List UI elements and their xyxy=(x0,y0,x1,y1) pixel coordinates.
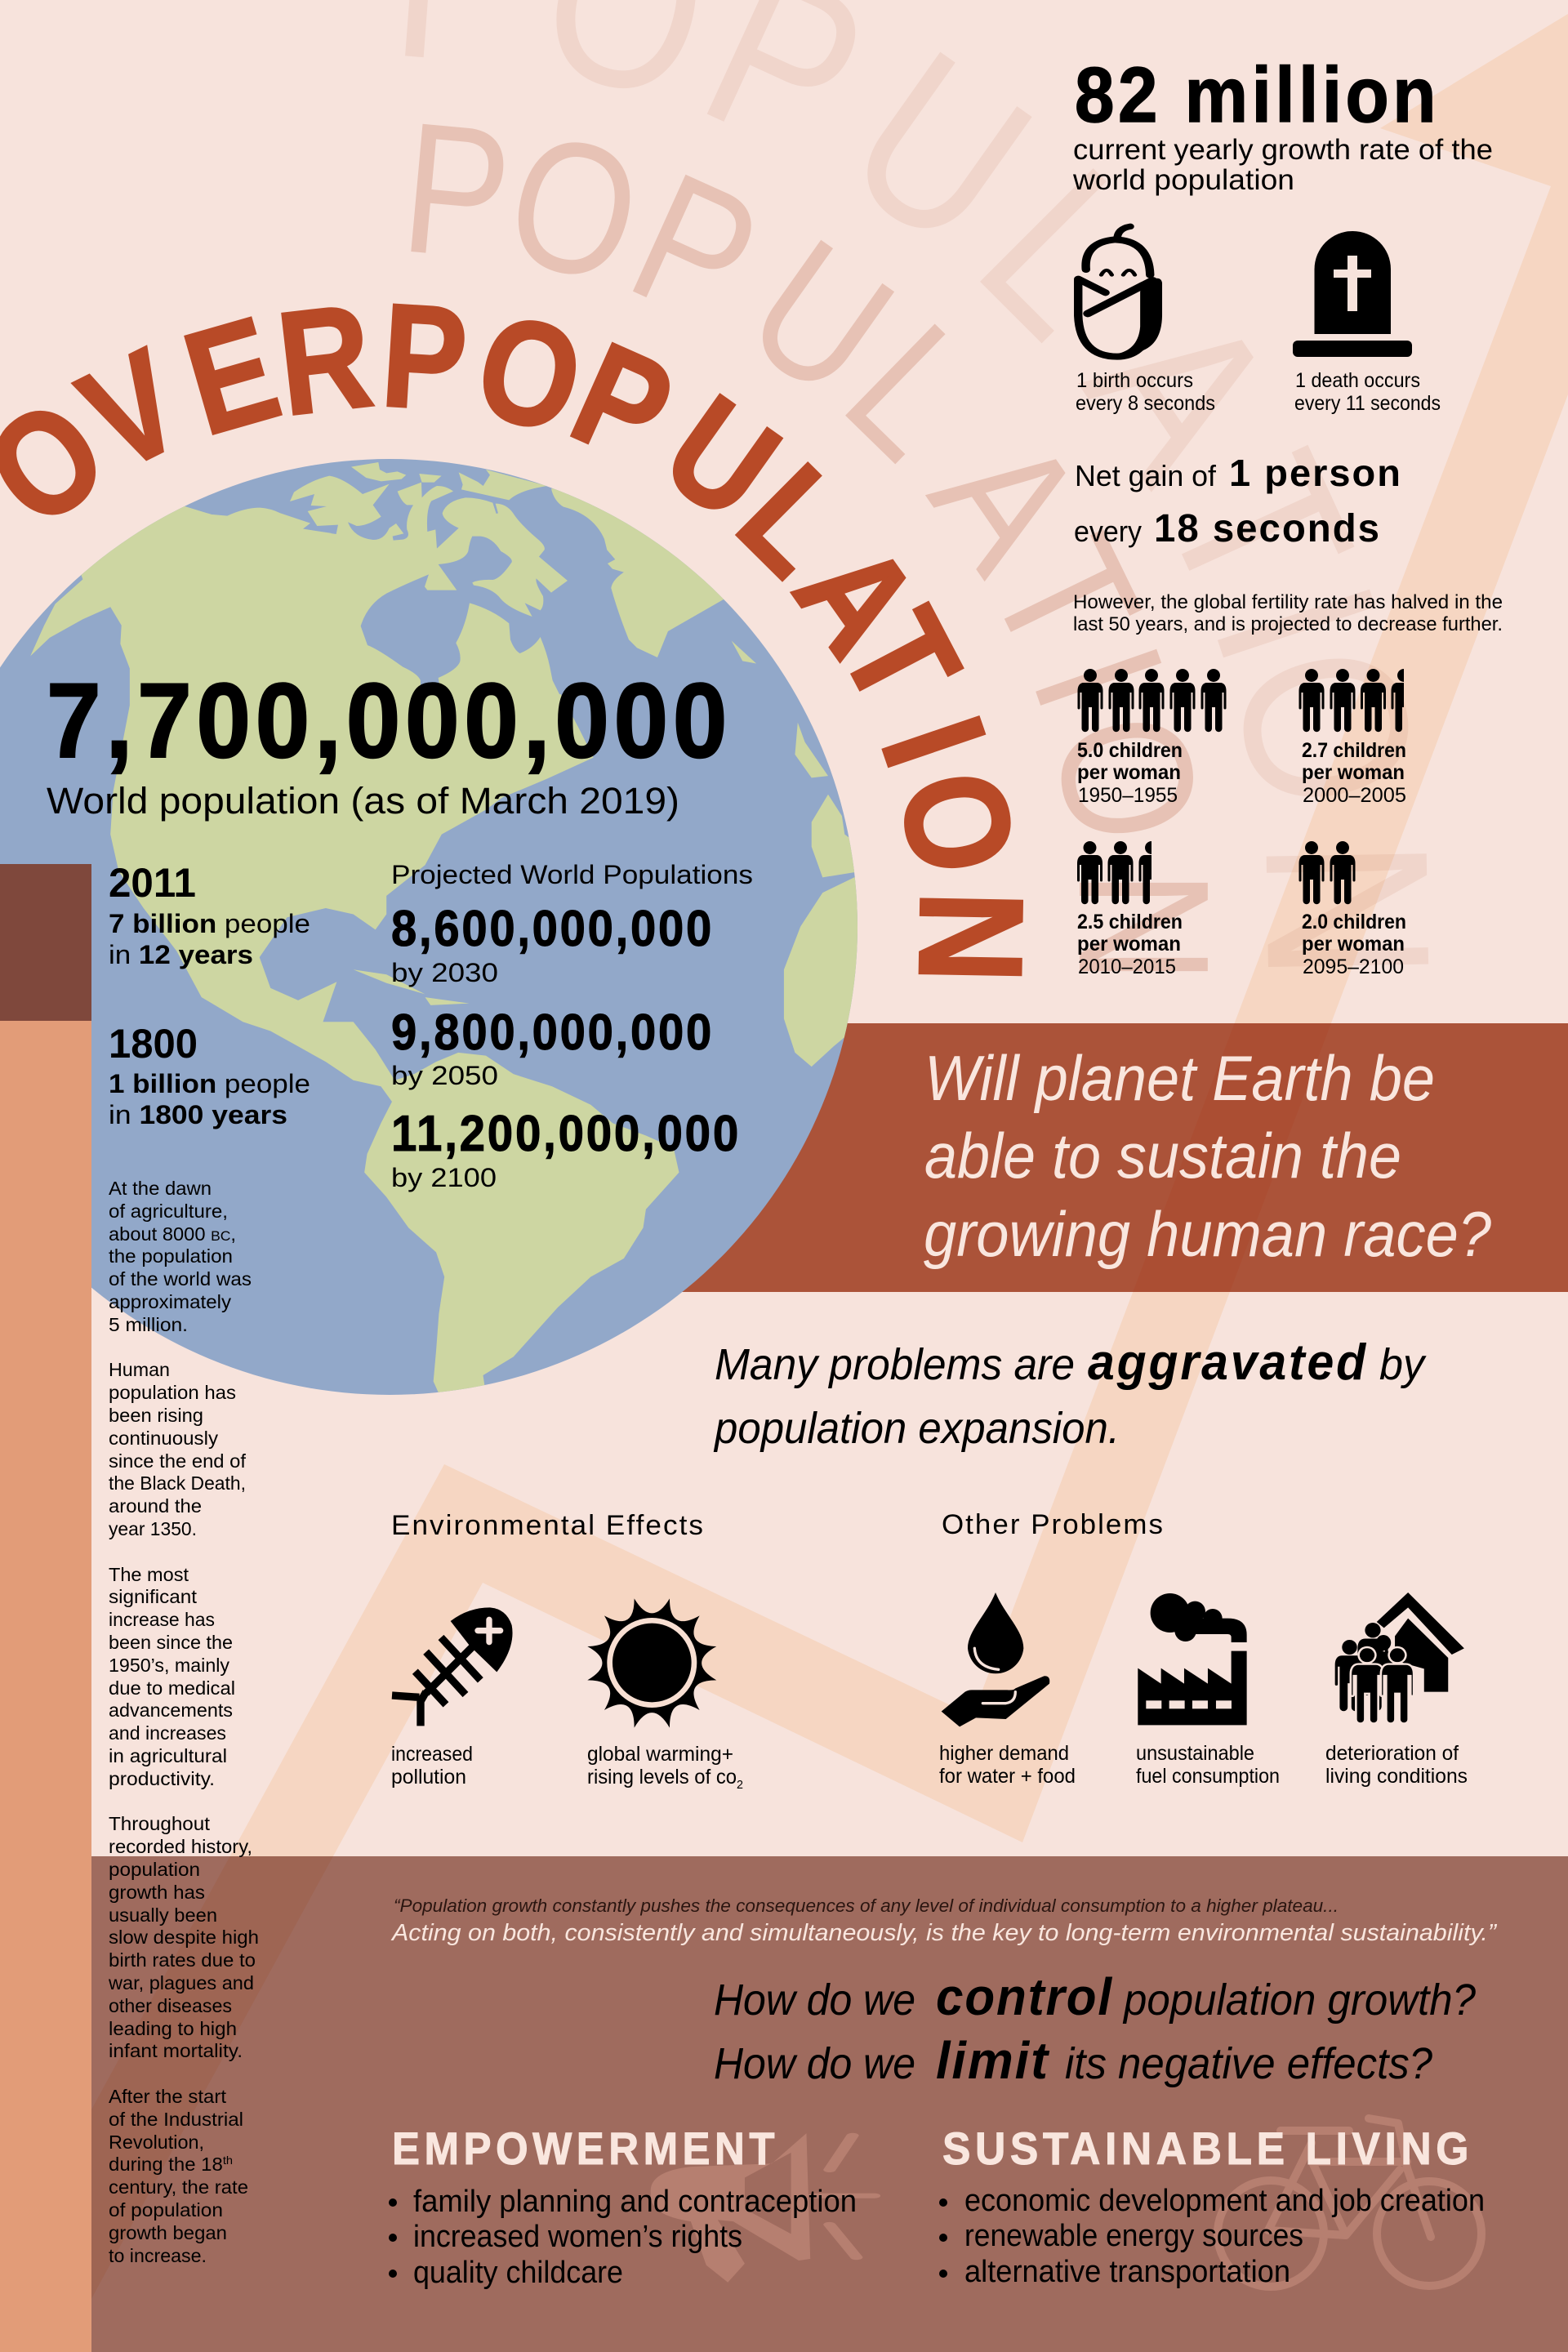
text block: history column: th xyxy=(223,2154,233,2167)
label: water and food: higher demand xyxy=(939,1742,1069,1765)
watermark: outer POPULATION arc: L xyxy=(933,122,1195,383)
chart: 2.7 children per woman xyxy=(1298,669,1405,802)
text block: history column: of agriculture, xyxy=(109,1200,228,1222)
watermark: outer POPULATION arc xyxy=(385,0,1478,984)
label: living conditions: deterioration of xyxy=(1325,1742,1459,1765)
label: increased pollution: pollution xyxy=(391,1766,466,1788)
text block: milestone 1800 xyxy=(109,1021,310,1129)
watermark: outer POPULATION arc: T xyxy=(1115,421,1401,639)
heading: environmental effects: Environmental Effects xyxy=(391,1510,705,1541)
text block: history column: leading to high xyxy=(109,2018,237,2039)
text block: milestone 1800: 1800 xyxy=(109,1021,198,1067)
chart: 5.0 children per woman: 5.0 children xyxy=(1077,739,1183,762)
chart: 5.0 children per woman xyxy=(1077,669,1227,807)
watermark: outer POPULATION arc: U xyxy=(806,3,1073,297)
watermark: inner POPULATION arc: P xyxy=(394,82,519,300)
chart: 2.5 children per woman xyxy=(1077,841,1183,978)
watermark: inner POPULATION arc: P xyxy=(605,132,786,366)
text block: history column: Throughout xyxy=(109,1813,211,1834)
quote: “Population growth constantly pushes the consequences of any level of individual consumption to a higher plateau... xyxy=(394,1895,1339,1916)
watermark: inner POPULATION arc: O xyxy=(488,91,660,324)
text block: milestone 1800: in 1800 years xyxy=(109,1100,287,1129)
title: P xyxy=(377,272,471,442)
text block: history column: since the end of xyxy=(109,1450,247,1472)
land: Iceland, Europe, Africa, Caribbean xyxy=(354,641,866,1067)
watermark: inner POPULATION arc: O xyxy=(1013,697,1242,859)
panel: empowerment: increased women’s rights xyxy=(413,2220,742,2254)
label: global warming: rising levels of co xyxy=(587,1766,744,1788)
heading: other problems: Other Problems xyxy=(942,1509,1165,1540)
text block: history column: approximately xyxy=(109,1291,232,1312)
text block: history column: growth began xyxy=(109,2222,227,2243)
title: I xyxy=(850,698,1018,785)
text block: death rate: every 11 seconds xyxy=(1294,392,1441,415)
question: will planet earth sustain: growing human race? xyxy=(924,1198,1492,1270)
chart: 2.0 children per woman xyxy=(1298,841,1406,978)
statement: problems aggravated: by xyxy=(1379,1340,1427,1389)
chart: 2.0 children per woman: 2.0 children xyxy=(1302,911,1406,933)
text block: projected world populations: Projected World Populations xyxy=(391,860,753,889)
label: water and food: for water + food xyxy=(939,1765,1076,1788)
statement: problems aggravated: Many problems are xyxy=(715,1340,1075,1389)
panel: empowerment: EMPOWERMENT xyxy=(392,2123,779,2174)
text block: projected world populations xyxy=(391,860,753,1192)
watermark: inner POPULATION arc: T xyxy=(951,508,1181,686)
title: E xyxy=(168,285,295,466)
question: will planet earth sustain xyxy=(924,1042,1492,1270)
chart: 2.7 children per woman: per woman xyxy=(1302,761,1405,784)
icon: megaphone watermark xyxy=(651,2133,875,2283)
title: U xyxy=(637,364,807,551)
text block: history column: in agricultural xyxy=(109,1745,227,1766)
watermark: inner POPULATION arc: I xyxy=(994,621,1205,733)
title: R xyxy=(270,273,380,447)
panel: sustainable living xyxy=(939,2123,1485,2289)
text block: history column: to increase. xyxy=(109,2245,207,2266)
land: Greenland xyxy=(551,476,729,657)
text block: history column: productivity. xyxy=(109,1768,215,1789)
headline stat: world population xyxy=(47,661,732,822)
text block: history column: birth rates due to xyxy=(109,1949,256,1971)
watermark: outer POPULATION arc: N xyxy=(1216,836,1478,984)
label: global warming: global warming+ xyxy=(587,1743,733,1766)
label: increased pollution xyxy=(391,1743,473,1788)
stat: net gain: 18 seconds xyxy=(1154,507,1381,550)
watermark: inner POPULATION arc: L xyxy=(808,286,1017,497)
watermark: inner POPULATION arc: N xyxy=(1040,870,1249,984)
question: limit negative effects xyxy=(714,2031,1432,2090)
watermark: inner POPULATION arc xyxy=(394,82,1249,984)
text block: projected world populations: by 2100 xyxy=(391,1163,497,1192)
text block: history column: population has xyxy=(109,1382,236,1403)
text block: history column: At the dawn xyxy=(109,1178,212,1199)
text block: projected world populations: by 2050 xyxy=(391,1061,498,1090)
watermark: inner POPULATION arc: A xyxy=(893,399,1124,604)
chart: 2.0 children per woman: 2095–2100 xyxy=(1303,956,1404,978)
text block: history column: century, the rate xyxy=(109,2176,248,2198)
land: Americas xyxy=(30,502,679,1400)
panel: empowerment xyxy=(389,2123,857,2290)
stat: 82 million growth rate xyxy=(1072,51,1493,196)
panel: empowerment: quality childcare xyxy=(413,2256,623,2290)
question: will planet earth sustain: Will planet Earth be xyxy=(924,1042,1435,1114)
stat: net gain: 1 person xyxy=(1229,452,1402,494)
text block: history column: year 1350. xyxy=(109,1518,197,1539)
watermark: outer POPULATION arc: I xyxy=(1165,556,1428,691)
text block: projected world populations: by 2030 xyxy=(391,958,498,987)
title xyxy=(0,272,1054,984)
text block: milestone 2011: 2011 xyxy=(109,860,196,906)
question: limit negative effects: limit xyxy=(936,2031,1050,2090)
panel: empowerment: family planning and contraception xyxy=(413,2185,857,2219)
text block: fertility note: last 50 years, and is projected to decrease further. xyxy=(1073,613,1503,635)
land: Canada and arctic xyxy=(212,462,568,721)
icon: bicycle watermark xyxy=(1218,2118,1481,2287)
text block: birth rate: every 8 seconds xyxy=(1076,392,1215,415)
label: fuel consumption: fuel consumption xyxy=(1136,1765,1280,1788)
statement: problems aggravated xyxy=(713,1334,1427,1453)
text block: milestone 2011 xyxy=(109,860,310,969)
text block: history column: the Black Death, xyxy=(109,1472,246,1494)
question: control population growth: How do we xyxy=(714,1976,915,2025)
text block: fertility note: However, the global fertility rate has halved in the xyxy=(1073,591,1503,613)
text block: history column: of population xyxy=(109,2199,223,2221)
text block: fertility note xyxy=(1073,591,1503,635)
text block: death rate xyxy=(1294,369,1441,415)
text block: history column: The most xyxy=(109,1564,189,1585)
icon: crowd and house xyxy=(1335,1592,1464,1723)
chart: 2.5 children per woman: 2010–2015 xyxy=(1078,956,1176,978)
stat: net gain: every xyxy=(1074,514,1142,548)
panel: sustainable living: renewable energy sources xyxy=(964,2219,1303,2253)
icon: swaddled baby xyxy=(1078,226,1162,357)
text block: history column: growth has xyxy=(109,1882,205,1903)
icon: water drop over hand xyxy=(942,1592,1049,1726)
text block: history column: continuously xyxy=(109,1428,219,1449)
text block: history column: Revolution, xyxy=(109,2132,204,2153)
icon: gravestone xyxy=(1293,231,1412,357)
question: control population growth: control xyxy=(936,1967,1113,2026)
chart: 2.5 children per woman: per woman xyxy=(1077,933,1181,956)
headline stat: world population: 7,700,000,000 xyxy=(47,661,732,780)
title: N xyxy=(888,890,1054,984)
text block: milestone 2011: 7 billion people xyxy=(109,909,310,938)
text block: milestone 1800: 1 billion people xyxy=(109,1069,310,1098)
watermark: outer POPULATION arc: O xyxy=(1183,626,1468,831)
text block: history column: during the 18 xyxy=(109,2154,218,2175)
text block: history column: increase has xyxy=(109,1609,215,1630)
chart: 2.7 children per woman: 2000–2005 xyxy=(1303,784,1406,807)
panel: question band background xyxy=(653,1023,1568,1292)
statement: problems aggravated: aggravated xyxy=(1088,1334,1368,1391)
text block: history column: 1950’s, mainly xyxy=(109,1655,229,1676)
text block: history column: around the xyxy=(109,1495,202,1517)
statement: problems aggravated: population expansion. xyxy=(713,1404,1120,1453)
quote xyxy=(390,1895,1497,1946)
stat: net gain: Net gain of xyxy=(1075,459,1217,492)
icon: fish skeleton xyxy=(392,1607,513,1726)
title: O xyxy=(461,282,598,466)
quote: Acting on both, consistently and simultaneously, is the key to long-term environmental sustainability.” xyxy=(390,1920,1497,1946)
question: limit negative effects: its negative effects? xyxy=(1065,2039,1432,2088)
text block: history column: infant mortality. xyxy=(109,2040,243,2061)
text block: history column: due to medical xyxy=(109,1677,235,1699)
label: global warming xyxy=(587,1743,743,1792)
title: O xyxy=(868,760,1048,886)
panel: sustainable living: SUSTAINABLE LIVING xyxy=(942,2123,1473,2174)
question: will planet earth sustain: able to sustain the xyxy=(924,1120,1401,1192)
label: fuel consumption: unsustainable xyxy=(1136,1742,1254,1765)
stat: 82 million growth rate: 82 million xyxy=(1075,51,1440,139)
text block: history column: slow despite high xyxy=(109,1927,259,1948)
text block: history column: After the start xyxy=(109,2086,227,2107)
text block: history column: been since the xyxy=(109,1632,233,1653)
left strip: dark block xyxy=(0,864,91,1021)
label: water and food xyxy=(939,1742,1076,1788)
icon: sun xyxy=(587,1598,716,1728)
label: fuel consumption xyxy=(1136,1742,1280,1788)
headline stat: world population: World population (as of March 2019) xyxy=(47,780,679,822)
text block: history column: Human xyxy=(109,1359,170,1380)
title: A xyxy=(764,514,951,683)
text block: history column: other diseases xyxy=(109,1995,232,2016)
watermark: inner POPULATION arc: U xyxy=(714,199,928,436)
panel: sustainable living: economic development and job creation xyxy=(964,2184,1485,2218)
text block: history column: recorded history, xyxy=(109,1836,252,1857)
globe xyxy=(0,457,898,1400)
text block: history column: significant xyxy=(109,1586,198,1607)
left strip: orange column xyxy=(0,1021,91,2352)
chart: 2.7 children per woman: 2.7 children xyxy=(1302,739,1406,762)
text block: history column: population xyxy=(109,1859,200,1880)
stat: 82 million growth rate: current yearly growth rate of the xyxy=(1073,134,1493,166)
text block: history column: been rising xyxy=(109,1405,203,1426)
text block: death rate: 1 death occurs xyxy=(1295,369,1420,392)
text block: birth rate: 1 birth occurs xyxy=(1076,369,1193,392)
title: L xyxy=(708,434,879,606)
question: control population growth xyxy=(714,1967,1476,2026)
text block: projected world populations: 11,200,000,000 xyxy=(391,1106,741,1162)
title: V xyxy=(57,318,207,502)
label: increased pollution: increased xyxy=(391,1743,473,1766)
chart: 2.0 children per woman: per woman xyxy=(1302,933,1405,956)
text block: history column: the population xyxy=(109,1245,233,1267)
text block: history column: war, plagues and xyxy=(108,1972,254,1993)
text block: history column: of the Industrial xyxy=(109,2109,243,2130)
chart: 5.0 children per woman: per woman xyxy=(1077,761,1181,784)
text block: history column: about 8000 BC, xyxy=(109,1223,236,1245)
text block: history column: 5 million. xyxy=(109,1314,188,1335)
label: living conditions: living conditions xyxy=(1325,1765,1468,1788)
stat: net gain xyxy=(1074,452,1402,550)
question: limit negative effects: How do we xyxy=(714,2039,915,2088)
label: living conditions xyxy=(1325,1742,1468,1788)
text block: milestone 2011: in 12 years xyxy=(109,940,253,969)
panel: sustainable living: alternative transportation xyxy=(964,2255,1290,2289)
text block: history column: of the world was xyxy=(109,1268,252,1290)
text block: projected world populations: 8,600,000,000 xyxy=(391,901,714,957)
icon: factory with smoke xyxy=(1138,1593,1247,1725)
watermark: outer POPULATION arc: A xyxy=(1036,266,1325,521)
text block: history column xyxy=(108,1178,259,2266)
text block: projected world populations: 9,800,000,000 xyxy=(391,1004,714,1061)
panel: bottom solutions band background xyxy=(91,1856,1568,2352)
chart: 2.5 children per woman: 2.5 children xyxy=(1077,911,1183,933)
label: global warming: 2 xyxy=(737,1778,743,1792)
text block: birth rate xyxy=(1076,369,1215,415)
chart: 5.0 children per woman: 1950–1955 xyxy=(1078,784,1178,807)
text block: history column: usually been xyxy=(109,1904,217,1926)
title: P xyxy=(550,310,695,496)
text block: history column: and increases xyxy=(109,1722,226,1744)
text block: history column: advancements xyxy=(109,1699,233,1721)
stat: 82 million growth rate: world population xyxy=(1072,164,1294,196)
title: T xyxy=(810,586,991,731)
question: control population growth: population growth? xyxy=(1122,1976,1476,2025)
